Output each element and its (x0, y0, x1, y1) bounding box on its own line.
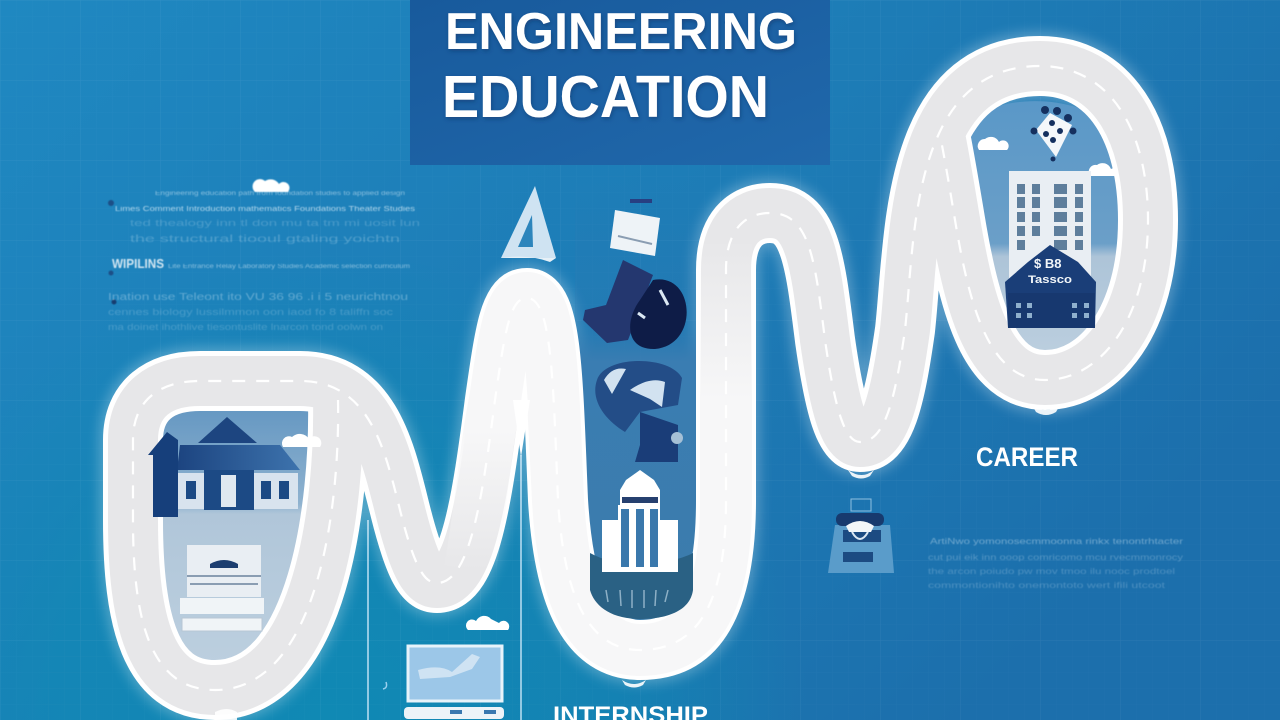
icon: network badge (1030, 106, 1076, 162)
text block: lower right description: cut pui eik inn ooop comricomo mcu rvecmmonrocy (928, 552, 1184, 562)
text block: lower right description (928, 536, 1184, 590)
title banner (410, 0, 830, 165)
icon: certificate card (610, 201, 660, 256)
text block: upper left description (108, 179, 420, 332)
icon: stack of books (180, 545, 264, 631)
panel: left loop interior (150, 405, 330, 665)
road junction highlights (215, 400, 1060, 720)
title banner: EDUCATION (442, 64, 769, 130)
icon: cloud beside house (282, 434, 321, 447)
text block: upper left description: Ination use Teleont ito VU 36 96 .i i 5 neurichtnou (108, 292, 408, 303)
icon: campus hall: $ B8 (1034, 256, 1061, 271)
text block: upper left description: Limes Comment Introduction mathematics Foundations Theater Studies (115, 206, 416, 213)
icon: office tower (1009, 171, 1091, 281)
panel: centre channel interior (575, 180, 705, 635)
panel: top loop interior (960, 101, 1126, 360)
icon: campus hall: Tassco (1028, 274, 1072, 286)
text block: upper left description: cennes biology lussilmmon oon iaod fo 8 taliffn soc (108, 307, 394, 317)
road: winding path (133, 66, 1148, 690)
text block: lower right description: ArtiNwo yomonosecmmoonna rinkx tenontrhtacter (930, 536, 1183, 546)
text block: upper left description: Engineering education path from foundation studies to applied design (155, 191, 405, 197)
text block: upper left description: ted thealogy inn tl don mu ta tm mi uosit lun (130, 218, 420, 228)
road glow (133, 66, 1148, 690)
vertical guide lines (368, 455, 521, 720)
text block: upper left description: the structural tiooul gtaling yoichtn (130, 234, 400, 245)
icon: house (148, 417, 300, 517)
icon: laptop (383, 646, 504, 719)
icon: briefcase (828, 499, 894, 573)
title banner: ENGINEERING (445, 3, 797, 61)
icon: clouds around tower (978, 137, 1118, 176)
icon: set square (501, 186, 556, 262)
icon: university building (590, 470, 693, 619)
icon: campus hall (1005, 245, 1096, 328)
icon: cloud above laptop (466, 616, 509, 630)
text block: upper left description: ma doinet ihothlive tiesontuslite lnarcon tond oolwn on (108, 322, 383, 332)
label: career: CAREER (976, 442, 1078, 472)
text block: lower right description: commontionihto onemontoto wert ifili utcoot (928, 580, 1166, 590)
text block: lower right description: the arcon poiudo pw mov tmoo ilu nooc prodtoel (928, 566, 1175, 576)
text block: upper left description: Lite Entrance Relay Laboratory Studies Academic selection curriculum (168, 264, 410, 270)
text block: upper left description: WIPILINS (112, 256, 164, 271)
icon: globe (595, 361, 683, 462)
icon: dark graduation cap and book (583, 260, 687, 349)
